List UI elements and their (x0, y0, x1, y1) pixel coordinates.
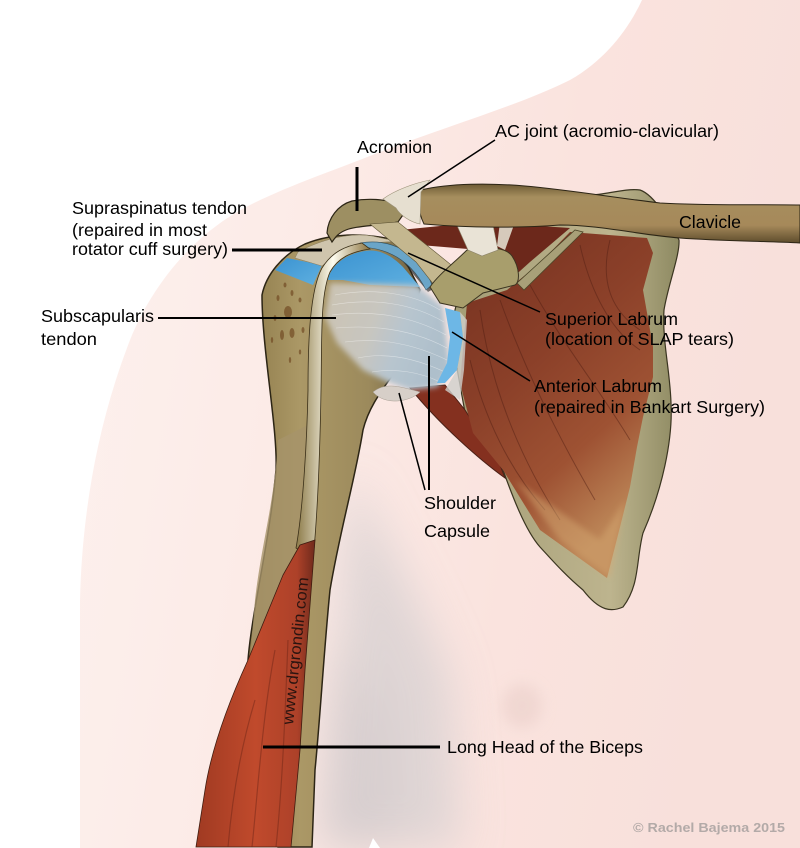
anterior labrum (437, 308, 463, 383)
label: Long Head of the Biceps: Long Head of the Biceps (447, 737, 643, 757)
acromion underside (370, 222, 455, 290)
label: Subscapularis tendon (41, 306, 154, 349)
bottom notch (369, 838, 380, 848)
muscle fibres (470, 240, 640, 520)
copyright: © Rachel Bajema 2015 (633, 821, 785, 835)
label: Shoulder Capsule: Capsule (424, 521, 490, 541)
capsule fibres (332, 292, 447, 382)
biceps fibres (228, 640, 288, 847)
supraspinatus tendon (295, 235, 400, 266)
label: Subscapularis tendon: Subscapularis (41, 306, 154, 326)
shadow under acromion (395, 250, 440, 292)
subscapularis tendon and capsule (325, 283, 450, 390)
chest shading (318, 470, 460, 848)
label: Superior Labrum (545, 309, 734, 349)
label: Superior Labrum: (location of SLAP tears) (545, 329, 734, 349)
superior labrum (360, 242, 432, 290)
scapula bone (450, 190, 679, 610)
blue humeral head cartilage (328, 251, 420, 287)
label: AC joint: AC joint (acromio-clavicular) (495, 121, 719, 141)
label: Supraspinatus tendon: rotator cuff surgery) (72, 239, 228, 259)
label: Supraspinatus tendon: (repaired in most (72, 220, 207, 240)
bone speckle (271, 282, 304, 363)
label: Shoulder Capsule (424, 493, 496, 541)
clavicle (419, 184, 800, 243)
coracoid ligaments (455, 220, 498, 256)
blue cartilage on tuberosity (275, 258, 322, 285)
medial humerus groove (250, 420, 318, 660)
label: Anterior Labrum (534, 376, 765, 417)
label: Subscapularis tendon: tendon (41, 329, 97, 349)
label: Anterior Labrum: Anterior Labrum (534, 376, 662, 396)
label: Acromion: Acromion (357, 137, 432, 157)
upper dark muscle behind coracoid (400, 222, 570, 280)
watermark: website: www.drgrondin.com (280, 576, 312, 726)
humerus (248, 235, 420, 847)
muscle light band (515, 480, 625, 578)
capsule lower pouch (373, 386, 420, 401)
nipple (502, 684, 542, 728)
label: Shoulder Capsule: Shoulder (424, 493, 496, 513)
biceps muscle (196, 540, 315, 847)
coracoid process (430, 248, 518, 308)
second ligament (497, 222, 515, 250)
label: Superior Labrum: Superior Labrum (545, 309, 678, 329)
scapular spine strut (517, 230, 583, 290)
leader lines (158, 140, 540, 747)
teres muscle (410, 385, 505, 478)
white capsule rim (445, 312, 467, 400)
label: Supraspinatus tendon: Supraspinatus tendon (72, 198, 247, 218)
label: Anterior Labrum: (repaired in Bankart Surgery) (534, 397, 765, 417)
label: Supraspinatus tendon (72, 198, 247, 259)
acromion (327, 199, 405, 242)
AC joint capsule (383, 180, 430, 224)
biceps tendon (296, 243, 370, 560)
label: Clavicle: Clavicle (679, 212, 741, 232)
subscapularis muscle (460, 232, 653, 578)
